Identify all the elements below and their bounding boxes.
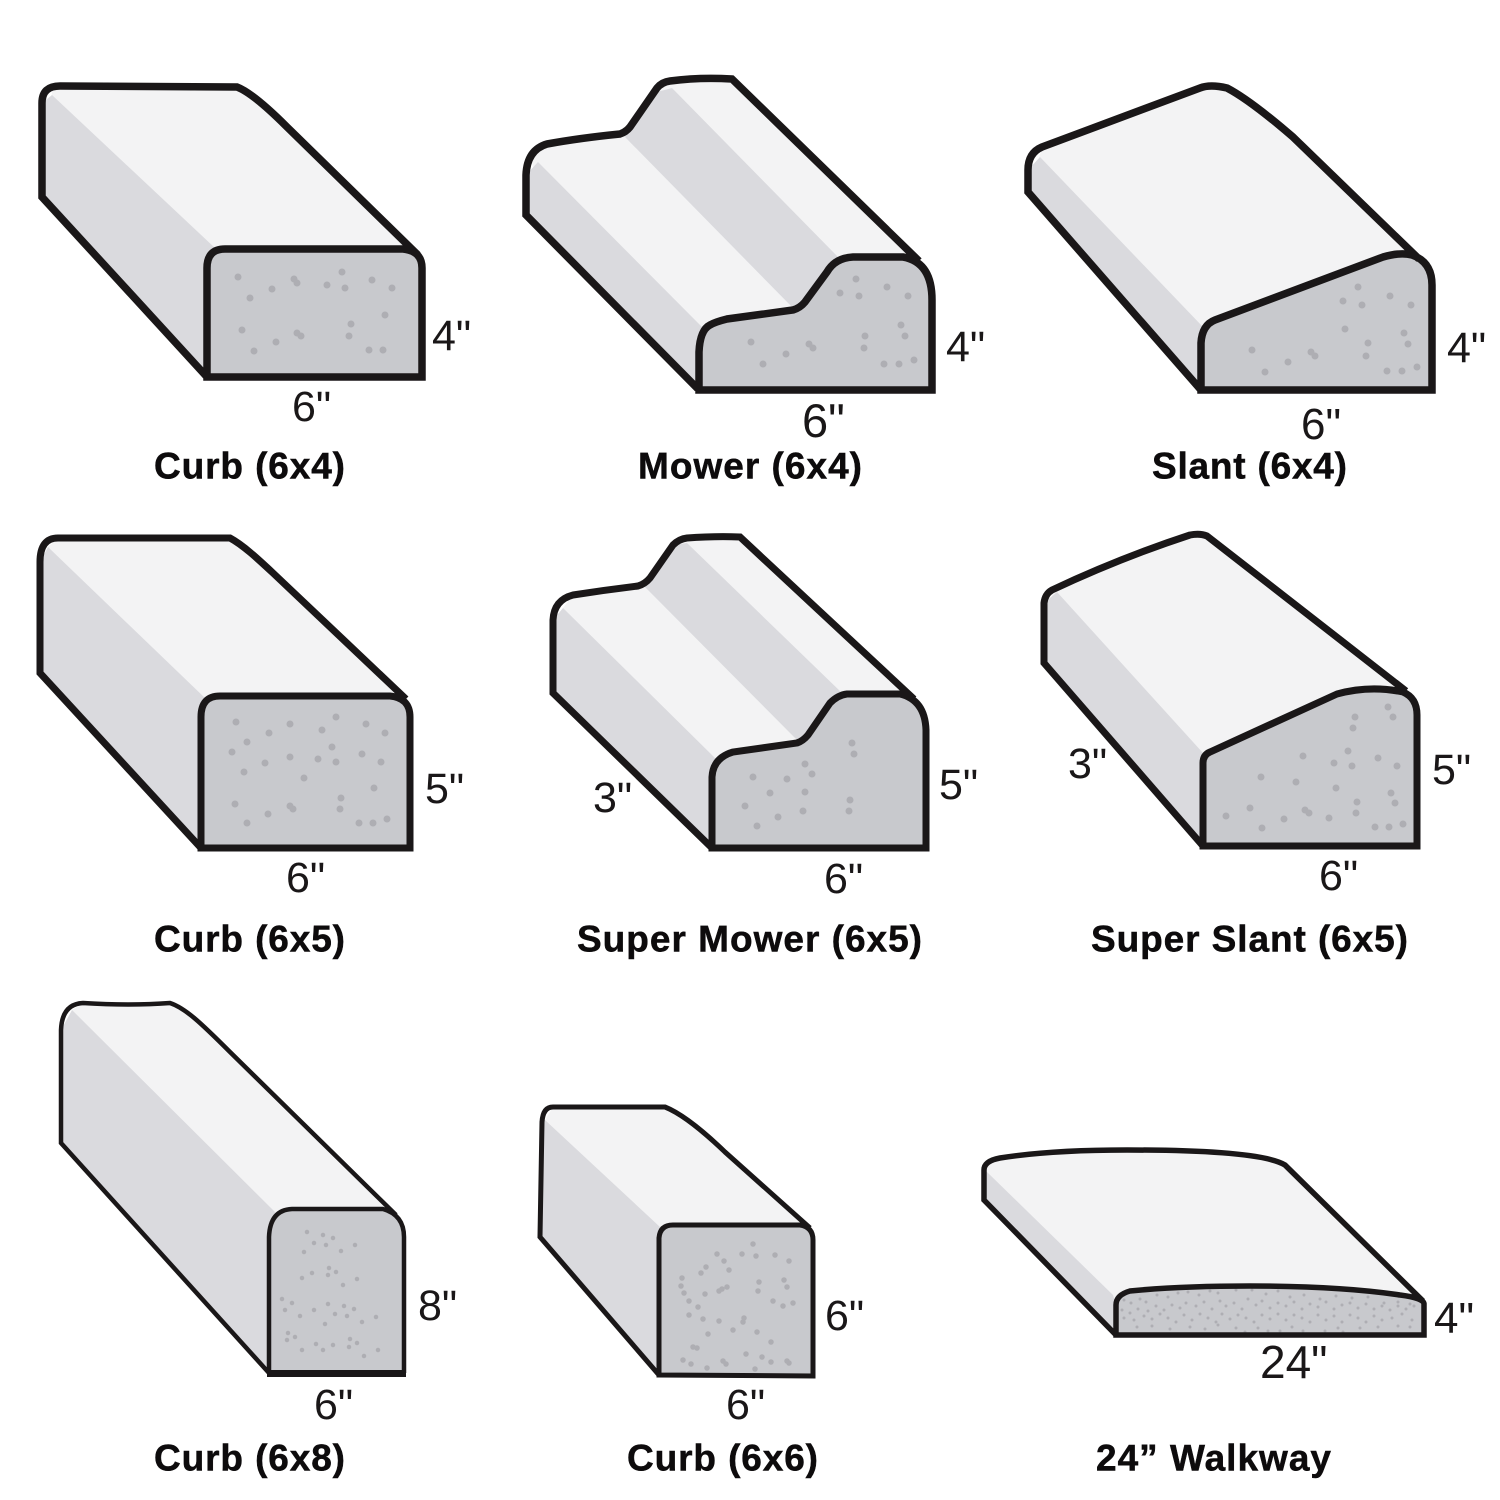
label: Slant 6x4: Slant (6x4): [1152, 446, 1347, 486]
outline: [1044, 534, 1417, 846]
cut face with aggregate: [201, 696, 410, 848]
recessed band: [625, 88, 838, 307]
thick base line: [267, 1370, 406, 1377]
label: Mower 6x4: Mower (6x4): [638, 446, 862, 486]
side surface: [61, 1010, 275, 1373]
outline: [984, 1150, 1424, 1335]
outline: [61, 1003, 404, 1373]
cut face with aggregate: [269, 1209, 404, 1373]
dimension: width: 6": [802, 394, 845, 447]
dimension: width: 6": [286, 854, 325, 902]
dimension: width: 6": [726, 1381, 765, 1429]
dimension: length: 3": [593, 774, 632, 822]
label: Super Slant 6x5: Super Slant (6x5): [1091, 918, 1408, 960]
side surface: [1028, 157, 1203, 390]
dimension: height: 4": [1434, 1294, 1474, 1343]
dimension: height: 4": [432, 312, 471, 360]
label: Super Mower 6x5: Super Mower (6x5): [577, 918, 922, 960]
outline: [40, 538, 410, 848]
label: 24 inch Walkway: 24” Walkway: [1096, 1438, 1331, 1478]
side surface: [984, 1170, 1116, 1335]
cut face with aggregate: [659, 1225, 813, 1376]
cut face with aggregate: [1201, 254, 1432, 390]
outline: [526, 78, 932, 390]
dimension: height: 6": [825, 1292, 864, 1340]
outline: [42, 86, 422, 377]
label: Curb 6x6: Curb (6x6): [627, 1438, 818, 1478]
dimension: height: 8": [418, 1282, 457, 1330]
dimension: width: 6": [1301, 400, 1341, 449]
dimension: length: 3": [1068, 740, 1107, 788]
side surface: [40, 547, 205, 848]
panel: Super Mower 6x5: [553, 537, 926, 848]
panel: Curb 6x8: [61, 1003, 457, 1377]
side surface: [42, 95, 215, 377]
panel: Curb 6x6: [540, 1107, 864, 1376]
label: Curb 6x4: Curb (6x4): [154, 446, 345, 486]
top surface: [66, 1003, 396, 1250]
dimension: width: 6": [292, 383, 331, 431]
dimension: width: 6": [824, 855, 863, 903]
side surface: [1044, 592, 1203, 846]
dimension: height: 4": [946, 323, 985, 371]
dimension: height: 5": [1432, 746, 1471, 794]
dimension: width: 6": [1319, 852, 1358, 900]
top surface: [543, 1107, 810, 1255]
cut face with aggregate: [699, 257, 932, 390]
dimension: height: 5": [425, 765, 464, 813]
outline: [540, 1107, 813, 1376]
outline: [1028, 86, 1432, 390]
top surface: [985, 1150, 1423, 1310]
side surface: [526, 162, 703, 390]
panel: Curb 6x4: [42, 86, 471, 377]
panel: 24 inch Walkway: [984, 1150, 1474, 1343]
side surface: [553, 608, 715, 848]
top surface: [1035, 86, 1419, 345]
panel: Slant 6x4: [1028, 86, 1486, 390]
panel: Mower 6x4: [526, 78, 985, 390]
cut face with aggregate: [712, 694, 926, 848]
top surface: [45, 538, 406, 740]
panel: Curb 6x5: [40, 538, 464, 848]
cut face with aggregate: [1116, 1286, 1424, 1335]
dimension: width: 6": [314, 1381, 353, 1429]
recessed band: [645, 543, 842, 740]
dimension: width: 24": [1260, 1336, 1328, 1388]
top surface: [530, 78, 919, 340]
top surface: [558, 537, 914, 775]
label: Curb 6x8: Curb (6x8): [154, 1438, 345, 1478]
cut face with aggregate: [207, 249, 422, 377]
top surface: [50, 87, 418, 300]
panel: Super Slant 6x5: [1044, 534, 1417, 846]
cut face with aggregate: [1203, 689, 1417, 846]
top surface: [1050, 534, 1406, 775]
label: Curb 6x5: Curb (6x5): [154, 918, 345, 960]
side surface: [540, 1120, 660, 1375]
dimension: height: 4": [1447, 324, 1486, 372]
dimension: height: 5": [939, 761, 978, 809]
outline: [553, 537, 926, 848]
